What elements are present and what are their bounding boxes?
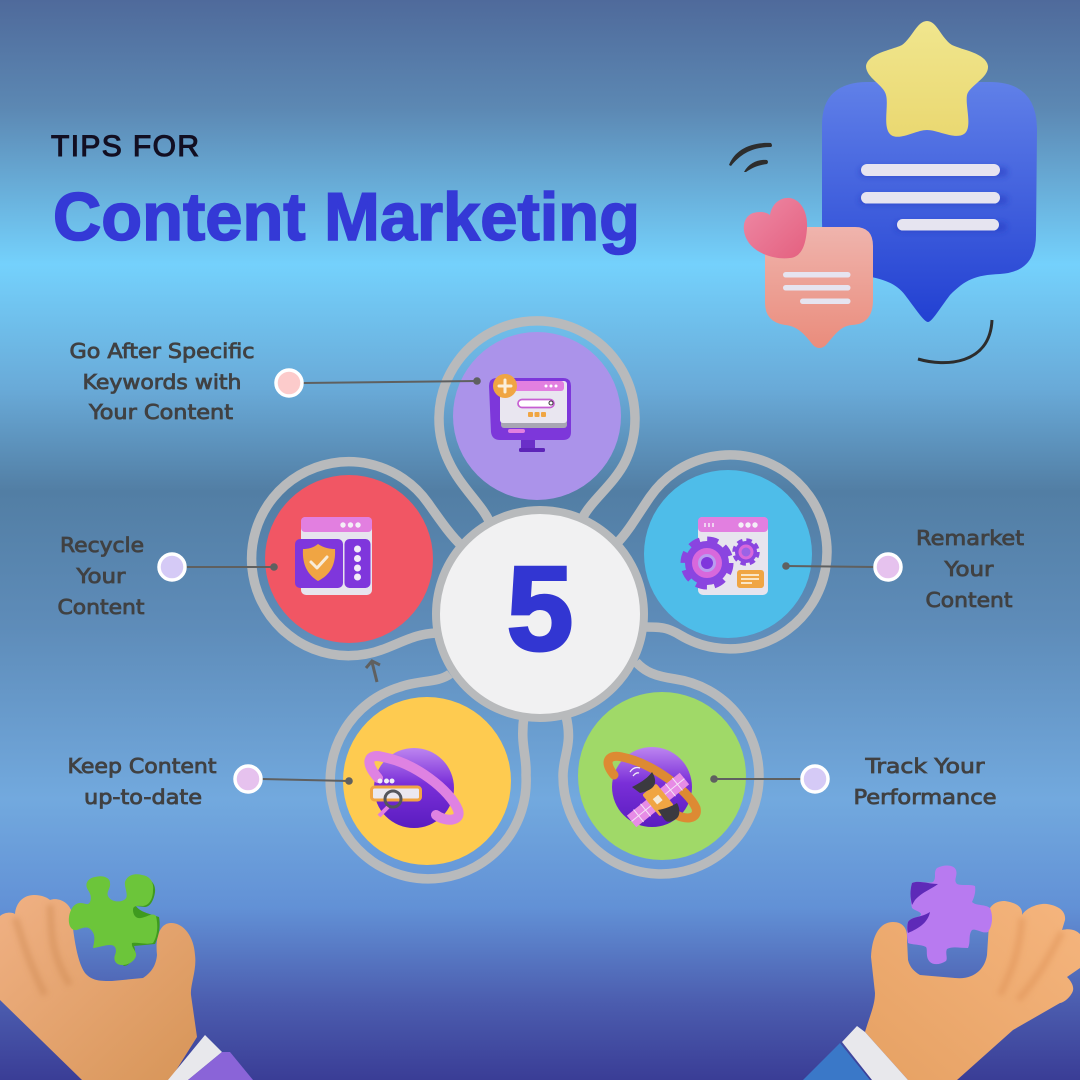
- petal outline: recycle: [252, 462, 462, 656]
- heading: content marketing: Content Marketing: [53, 179, 640, 255]
- label: recycle: Recycle: [60, 533, 144, 557]
- sleeve: [188, 1052, 253, 1080]
- puzzle piece: green: [69, 874, 160, 966]
- icon: pink speech bubble: [765, 227, 873, 348]
- icon: planet with search bar: [369, 748, 459, 828]
- petal: yellow: [343, 697, 511, 865]
- icon: yellow star: [866, 21, 988, 137]
- sleeve: [803, 1043, 870, 1080]
- cuff: [842, 1026, 908, 1080]
- label: remarket: Content: [926, 588, 1013, 612]
- centre circle with number: 5: [507, 542, 573, 676]
- petal: red: [265, 475, 433, 643]
- icon: shield dashboard: [295, 517, 372, 595]
- leader line and marker: [159, 554, 278, 580]
- icon: settings gears window: [684, 517, 768, 595]
- label: track performance: Performance: [854, 785, 996, 809]
- leader line and marker: [710, 766, 828, 792]
- callout: keep content up to date: [68, 754, 353, 809]
- label: recycle: Your: [75, 564, 126, 588]
- hand: [865, 901, 1080, 1080]
- label: remarket: Remarket: [916, 526, 1024, 550]
- label: remarket: [916, 526, 1024, 612]
- label: keywords: Your Content: [88, 400, 233, 424]
- label: keywords: Go After Specific: [70, 339, 254, 363]
- icon: heart: [744, 198, 807, 258]
- centre circle with number: [436, 510, 644, 718]
- flower diagram: [252, 321, 827, 879]
- label: keep content: Keep Content: [68, 754, 217, 778]
- small arrow: [366, 661, 380, 682]
- label: remarket: Your: [943, 557, 994, 581]
- label: keep content: [68, 754, 217, 809]
- cuff: [168, 1035, 222, 1080]
- decorative arcs: upper left: [729, 143, 772, 172]
- decorative arc: lower right: [918, 320, 992, 363]
- petal: blue: [644, 470, 812, 638]
- petal: green: [578, 692, 746, 860]
- callout: keywords: [70, 339, 481, 424]
- callout: track performance: [710, 754, 996, 809]
- label: track performance: Track Your: [864, 754, 985, 778]
- label: keep content: up-to-date: [84, 785, 202, 809]
- callout: remarket: [782, 526, 1024, 612]
- icon: planet with satellite: [608, 747, 696, 828]
- label: track performance: [854, 754, 996, 809]
- petal outline: track performance: [563, 662, 759, 874]
- label: recycle: [58, 533, 145, 619]
- puzzle piece: purple: [907, 866, 992, 964]
- label: keywords: [70, 339, 254, 424]
- icon: blue speech bubble: [822, 82, 1037, 322]
- icon: monitor with search window: [489, 374, 571, 452]
- petal: purple: [453, 332, 621, 500]
- callout: recycle: [58, 533, 278, 619]
- illustration: left hand with green puzzle piece: [0, 874, 253, 1080]
- petal outline: keywords: [439, 321, 635, 521]
- leader line and marker: [235, 766, 353, 792]
- label: recycle: Content: [58, 595, 145, 619]
- subtitle: tips for: TIPS FOR: [51, 130, 199, 163]
- title block: [51, 130, 640, 255]
- hand: [0, 895, 197, 1080]
- leader line and marker: [782, 554, 901, 580]
- petal outline: keep up to date: [330, 674, 526, 879]
- petal outline: remarket: [618, 455, 827, 649]
- illustration: right hand with purple puzzle piece: [803, 866, 1080, 1080]
- leader line and marker: [276, 370, 481, 396]
- label: keywords: Keywords with: [82, 370, 242, 394]
- illustration: chat bubbles with star and heart: [729, 21, 1037, 363]
